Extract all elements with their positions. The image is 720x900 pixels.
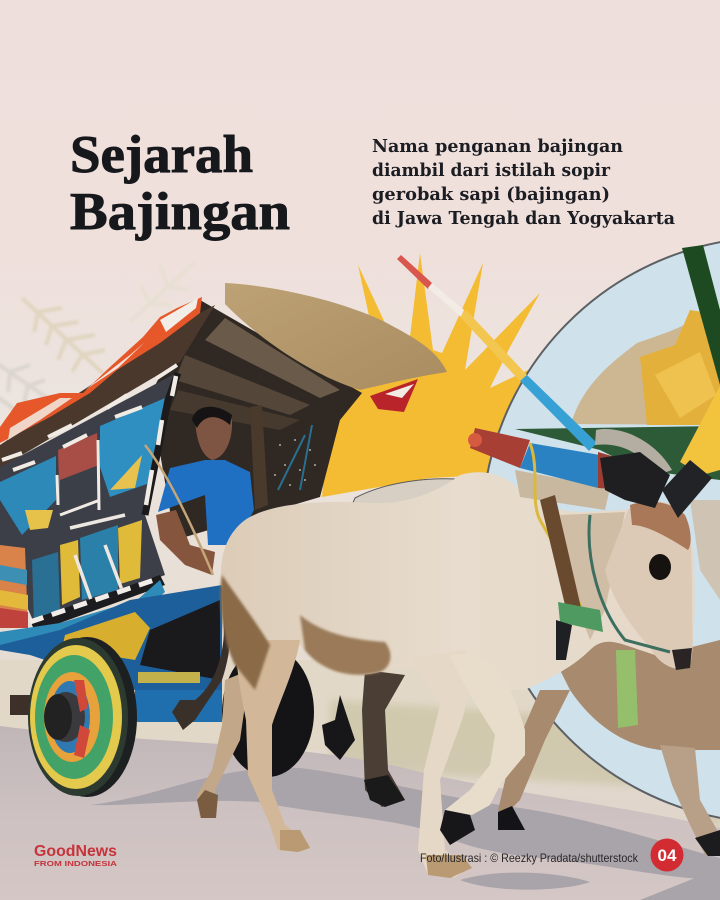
- logo: GoodNews from Indonesia: FROM INDONESIA: [34, 859, 118, 868]
- blue ropes: [278, 425, 312, 490]
- title: [70, 126, 290, 241]
- black lifted hoof: [440, 810, 475, 845]
- photo credit: Foto/Ilustrasi : © Reezky Pradata/shutterstock: [420, 851, 639, 865]
- panel B: [58, 433, 99, 512]
- far hoof shadow: [197, 790, 218, 818]
- face: [195, 409, 232, 460]
- nose: [672, 648, 692, 670]
- broth and cassava chunks: [571, 310, 720, 425]
- black tail: [322, 695, 355, 760]
- striped side stack: [0, 545, 28, 628]
- ground and road: [0, 660, 720, 900]
- arm: [156, 510, 215, 575]
- logo: GoodNews from Indonesia: [34, 843, 118, 868]
- wooden yoke log: [515, 470, 610, 510]
- left front leg: [412, 650, 470, 877]
- back of second ox: [350, 479, 470, 510]
- halter rope: [589, 515, 670, 652]
- red and blue yoke beam: [468, 428, 672, 508]
- yellow and black skewer: [680, 386, 720, 475]
- canvas roof: [225, 283, 447, 390]
- page number badge: [650, 838, 684, 872]
- far hoof: [695, 830, 720, 856]
- cart: [0, 283, 447, 722]
- cast shadows on road: [90, 768, 720, 880]
- logo: GoodNews from Indonesia: GoodNews: [34, 843, 117, 860]
- right front leg: [445, 654, 525, 815]
- description text: [372, 136, 675, 229]
- cart driver: [145, 407, 254, 575]
- body: [221, 472, 695, 690]
- description text: gerobak sapi (bajingan): [372, 184, 610, 205]
- floor beam stripes: [30, 575, 165, 632]
- main white ox: [172, 428, 695, 878]
- far leg: [660, 745, 720, 855]
- dark hind legs: [362, 670, 405, 807]
- tail: [172, 605, 230, 730]
- lower panel colours: [80, 525, 118, 600]
- yellow rope and strap: [530, 443, 582, 610]
- dark hoof: [498, 806, 525, 830]
- front hoof: [426, 855, 472, 878]
- lower blue cart box: [0, 585, 222, 722]
- roof beam band: [0, 305, 215, 468]
- white bricks: [2, 365, 177, 470]
- dirt patch on rump: [221, 575, 270, 690]
- blue shirt: [158, 460, 254, 545]
- description text: diambil dari istilah sopir: [372, 160, 610, 181]
- panel C: [100, 398, 165, 497]
- page number badge: 04: [658, 846, 677, 865]
- title: Sejarah: [70, 126, 253, 184]
- green tag: [558, 602, 603, 632]
- head: [690, 500, 720, 600]
- eye: [649, 554, 671, 580]
- dark green leaf spike: [682, 245, 720, 385]
- panel A: [0, 456, 56, 535]
- black skewer tip over ox: [662, 460, 712, 518]
- description text: Nama penganan bajingan: [372, 136, 623, 157]
- reins: [145, 445, 213, 575]
- title: Bajingan: [70, 183, 290, 241]
- front wheel: [28, 637, 137, 797]
- body: [545, 630, 720, 750]
- rear hoof: [280, 830, 310, 852]
- rear dark wheel: [222, 647, 314, 777]
- ox head: [589, 501, 693, 670]
- hind leg: [235, 640, 310, 852]
- vertical post with white blocks: [145, 373, 178, 515]
- red and white flag under canvas: [370, 379, 418, 412]
- neck shading: [560, 512, 625, 640]
- cart interior: [150, 300, 362, 540]
- dotted window: [274, 439, 316, 486]
- decorated skewer stick: [397, 255, 597, 451]
- wooden post: [250, 405, 268, 510]
- far hind leg: [197, 670, 250, 818]
- second ox behind: [322, 479, 720, 856]
- banana leaf band: [515, 426, 720, 480]
- front leg: [498, 690, 570, 815]
- yellow sun burst: [322, 253, 540, 497]
- faded palm fronds: [0, 262, 195, 412]
- description text: di Jawa Tengah dan Yogyakarta: [372, 208, 675, 229]
- under-panel backing: [0, 372, 178, 625]
- plate of bajingan: [482, 237, 720, 823]
- orange flag trim: [0, 297, 202, 443]
